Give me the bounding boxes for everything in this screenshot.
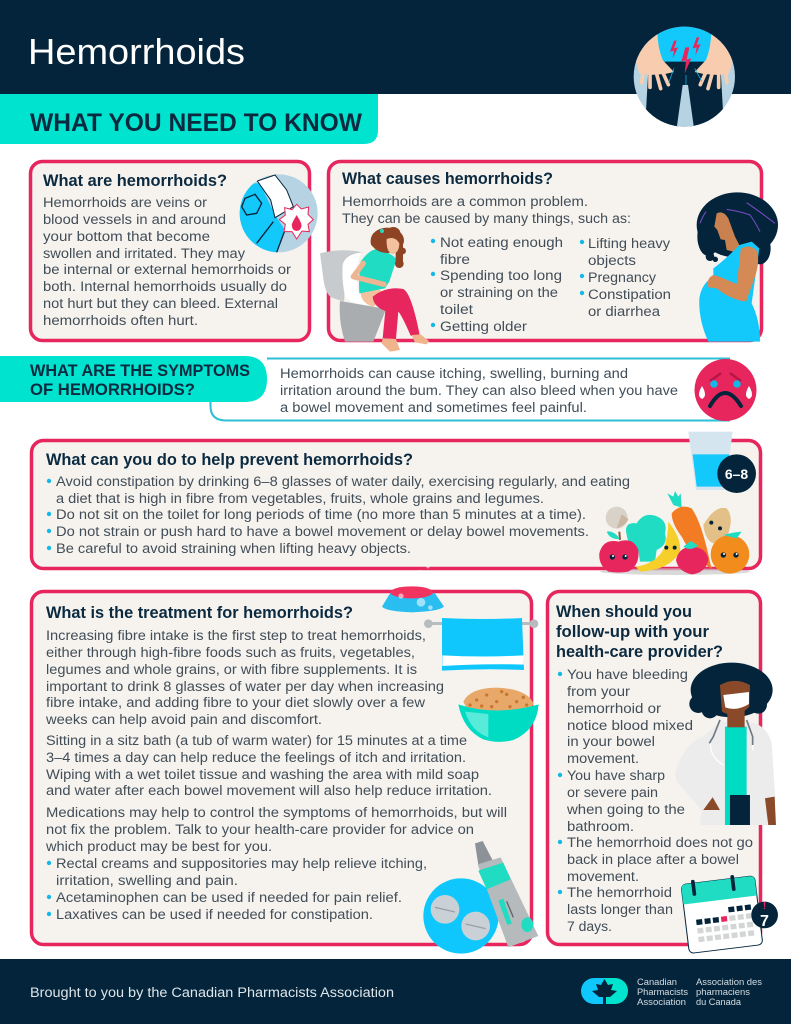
icon: pregnant woman xyxy=(697,192,778,342)
text block: sitz bath xyxy=(46,733,492,798)
list: when to see a provider: The hemorrhoid does not go xyxy=(567,835,753,850)
list: when to see a provider: from your xyxy=(567,684,631,699)
list: when to see a provider: 7 days. xyxy=(567,919,612,934)
list: when to see a provider: You have sharp xyxy=(567,768,665,783)
icon: crying face xyxy=(694,359,756,421)
icon: bowl of fibre cereal xyxy=(458,688,539,742)
list: when to see a provider xyxy=(558,667,753,934)
icon: fruits and vegetables xyxy=(599,491,750,575)
banner: what you need to know xyxy=(0,94,378,144)
panel: what are hemorrhoids xyxy=(30,162,310,340)
heading: prevention: What can you do to help prevent hemorrhoids? xyxy=(46,451,413,469)
list: medications: irritation, swelling and pain. xyxy=(56,873,238,888)
text block: sitz bath: and water after each bowel movement will also help reduce irritation. xyxy=(46,783,492,798)
heading: follow-up: When should you xyxy=(556,603,692,621)
icon: bleeding close-up xyxy=(237,174,318,255)
symptoms text: Hemorrhoids can cause itching, swelling, burning and xyxy=(280,366,628,381)
list: prevention tips: a diet that is high in fibre from vegetables, fruits, whole grains and legumes. xyxy=(56,491,544,506)
list: when to see a provider: lasts longer than xyxy=(567,902,673,917)
list: when to see a provider: notice blood mixed xyxy=(567,718,693,733)
list: prevention tips: Be careful to avoid straining when lifting heavy objects. xyxy=(56,541,411,556)
list: causes column one: fibre xyxy=(440,252,470,267)
text block: definition xyxy=(43,195,292,328)
logo text: English: Canadian xyxy=(637,976,677,987)
list: when to see a provider: when going to the xyxy=(566,802,685,817)
list: causes column one: toilet xyxy=(440,302,473,317)
logo text: French: pharmaciens xyxy=(696,986,750,997)
symptoms text: irritation around the bum. They can also bleed when you have xyxy=(280,383,678,398)
panel: follow-up xyxy=(548,592,760,944)
text block: intro: Hemorrhoids are a common problem. xyxy=(342,194,588,209)
text block: medications: which product may be best for you. xyxy=(45,839,272,854)
section: symptoms xyxy=(0,356,730,420)
logo text: English: Association xyxy=(637,996,686,1007)
list: when to see a provider: hemorrhoid or xyxy=(567,701,662,716)
icon: doctor with mask xyxy=(675,663,776,825)
text block: definition: both. Internal hemorrhoids usually do xyxy=(43,279,287,294)
list: when to see a provider: The hemorrhoid xyxy=(567,885,672,900)
text block: intro: They can be caused by many things, such as: xyxy=(342,211,631,226)
list: when to see a provider: movement. xyxy=(567,751,639,766)
text block: definition: be internal or external hemorrhoids or xyxy=(43,262,292,277)
text block: definition: hemorrhoids often hurt. xyxy=(43,313,198,328)
logo text: English xyxy=(637,976,688,1007)
text block: definition: blood vessels in and around xyxy=(43,212,226,227)
icon: pills and cream tube xyxy=(423,841,538,954)
list: causes column one: Not eating enough xyxy=(440,235,563,250)
list: causes column two: Pregnancy xyxy=(588,270,656,285)
logo text: French xyxy=(696,976,762,1007)
footer credit: Brought to you by the Canadian Pharmacists Association xyxy=(30,985,394,1000)
text block: fibre and water: Increasing fibre intake is the first step to treat hemorrhoids, xyxy=(46,628,426,643)
footer band xyxy=(0,959,791,1024)
list: prevention tips: Do not sit on the toilet for long periods of time (no more than 5 minutes at a time). xyxy=(56,507,586,522)
icon: glass of water xyxy=(688,432,756,493)
title: Hemorrhoids xyxy=(28,31,245,72)
text block: fibre and water xyxy=(45,628,444,727)
text block: fibre and water: weeks can help avoid pain and discomfort. xyxy=(45,712,322,727)
heading: treatment: What is the treatment for hemorrhoids? xyxy=(46,604,353,622)
text block: fibre and water: important to drink 8 glasses of water per day when increasing xyxy=(46,679,444,694)
list: when to see a provider: You have bleeding xyxy=(567,667,688,682)
heading: follow-up xyxy=(556,603,723,661)
calendar badge number: ! xyxy=(763,901,766,912)
panel: prevention xyxy=(32,440,760,568)
symptoms heading: WHAT ARE THE SYMPTOMS xyxy=(30,361,250,380)
list: medications: Laxatives can be used if needed for constipation. xyxy=(56,907,373,922)
list: when to see a provider: bathroom. xyxy=(567,819,634,834)
logo text: French: Association des xyxy=(696,976,762,987)
list: causes column two: Constipation xyxy=(588,287,671,302)
text block: fibre and water: either through high-fibre foods such as fruits, vegetables, xyxy=(46,645,415,660)
list: causes column two: Lifting heavy xyxy=(588,236,670,251)
text block: definition: Hemorrhoids are veins or xyxy=(43,195,208,210)
text block: medications xyxy=(45,805,507,854)
calendar badge number: 7 xyxy=(760,913,769,930)
list: causes column two xyxy=(580,236,671,319)
list: when to see a provider: back in place after a bowel xyxy=(567,852,739,867)
logo: Canadian Pharmacists Association xyxy=(581,976,762,1007)
list: causes column two: or diarrhea xyxy=(588,304,661,319)
heading: follow-up: follow-up with your xyxy=(556,623,710,641)
text block: definition: your bottom that become xyxy=(43,229,210,244)
panel: treatment xyxy=(32,592,532,944)
text block: sitz bath: Wiping with a wet toilet tissue and washing the area with mild soap xyxy=(46,767,479,782)
text block: definition: not hurt but they can bleed. External xyxy=(43,296,278,311)
list: causes column two: objects xyxy=(588,253,636,268)
symptoms text xyxy=(280,366,678,415)
panel: what causes hemorrhoids xyxy=(328,162,762,340)
text block: medications: Medications may help to control the symptoms of hemorrhoids, but will xyxy=(46,805,507,820)
logo text: French: du Canada xyxy=(696,996,742,1007)
symptoms text: a bowel movement and sometimes feel painful. xyxy=(280,400,587,415)
list: prevention tips xyxy=(47,474,630,556)
heading: follow-up: health-care provider? xyxy=(556,643,723,661)
outline box xyxy=(210,358,730,420)
icon: towel on rail xyxy=(424,618,538,671)
calendar badge number xyxy=(760,901,769,930)
list: causes column one xyxy=(431,235,563,334)
list: prevention tips: Avoid constipation by drinking 6–8 glasses of water daily, exercising regularly, and eating xyxy=(56,474,630,489)
logo text: English: Pharmacists xyxy=(637,986,688,997)
heading: what are hemorrhoids: What are hemorrhoids? xyxy=(43,172,227,190)
text block: definition: swollen and irritated. They may xyxy=(43,246,245,261)
text block: medications: not fix the problem. Talk to your health-care provider for advice on xyxy=(46,822,474,837)
list: when to see a provider: in your bowel xyxy=(567,734,655,749)
text block: fibre and water: fibre intake, and adding fibre to your diet slowly over a few xyxy=(46,695,425,710)
icon: glass of water: 6–8 xyxy=(725,466,748,482)
header band xyxy=(0,0,791,94)
icon: sitz bath tub xyxy=(382,565,444,612)
icon: woman on toilet xyxy=(320,227,429,352)
text block: fibre and water: legumes and whole grains, or with fibre supplements. It is xyxy=(46,662,417,677)
icon: hands on painful bottom xyxy=(634,26,735,127)
symptoms heading xyxy=(30,361,250,399)
list: causes column one: Getting older xyxy=(440,319,528,334)
symptoms tab xyxy=(0,356,267,402)
icon: calendar xyxy=(681,872,778,954)
text block: sitz bath: Sitting in a sitz bath (a tub of warm water) for 15 minutes at a time xyxy=(46,733,467,748)
list: when to see a provider: or severe pain xyxy=(567,785,658,800)
text block: intro xyxy=(342,194,631,226)
list: prevention tips: Do not strain or push hard to have a bowel movement or delay bowel movements. xyxy=(56,524,589,539)
list: medications: Rectal creams and suppositories may help relieve itching, xyxy=(56,856,427,871)
list: causes column one: or straining on the xyxy=(440,285,558,300)
heading: what causes hemorrhoids: What causes hemorrhoids? xyxy=(342,170,553,188)
banner heading: WHAT YOU NEED TO KNOW xyxy=(30,109,362,137)
list: causes column one: Spending too long xyxy=(440,268,562,283)
text block: sitz bath: 3–4 times a day can help reduce the feelings of itch and irritation. xyxy=(46,750,466,765)
list: when to see a provider: movement. xyxy=(567,869,639,884)
list: medications xyxy=(47,856,427,922)
list: medications: Acetaminophen can be used if needed for pain relief. xyxy=(56,890,402,905)
symptoms heading: OF HEMORRHOIDS? xyxy=(30,380,195,399)
